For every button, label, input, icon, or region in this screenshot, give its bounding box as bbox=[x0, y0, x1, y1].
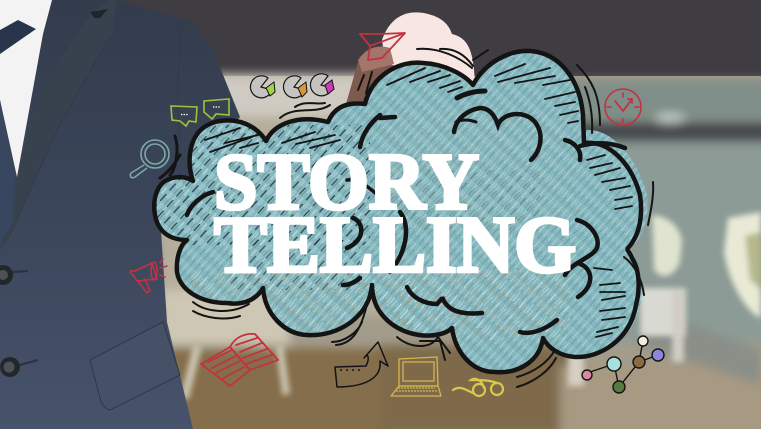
icon: open book bbox=[201, 334, 278, 386]
icon: red paper plane bbox=[360, 33, 405, 60]
jacket buttons bbox=[0, 265, 38, 377]
person: businessman in suit bbox=[0, 0, 475, 429]
icon: magnifying glass bbox=[130, 140, 169, 178]
icon: green speech bubbles bbox=[171, 99, 229, 126]
icon: megaphone bbox=[130, 259, 167, 293]
icon: glasses bbox=[453, 379, 503, 396]
background: blurred chairs and windows bbox=[180, 212, 761, 400]
cloud fill and hatching bbox=[150, 45, 655, 380]
cloud ink outline bbox=[154, 51, 641, 372]
icon: pie charts bbox=[250, 74, 334, 98]
title line: TELLING: TELLING bbox=[214, 202, 576, 290]
lapel shading bbox=[0, 0, 117, 250]
forearm and hand bbox=[340, 12, 475, 125]
cloud inner curves bbox=[187, 91, 625, 333]
jacket pocket flap bbox=[90, 322, 180, 410]
title line: STORY: STORY bbox=[214, 138, 479, 226]
tie bbox=[0, 20, 36, 242]
icon: clock bbox=[605, 89, 641, 125]
icon: curved arrow bbox=[335, 342, 388, 387]
white shirt bbox=[0, 0, 52, 177]
cloud motion swooshes bbox=[160, 49, 653, 387]
icon: laptop bbox=[391, 357, 441, 396]
cloud short hatch strokes bbox=[205, 64, 632, 337]
storytelling cloud bbox=[150, 45, 655, 387]
suit jacket bbox=[0, 0, 240, 429]
title: STORY TELLING bbox=[214, 138, 576, 290]
icon: network nodes bbox=[582, 336, 664, 393]
